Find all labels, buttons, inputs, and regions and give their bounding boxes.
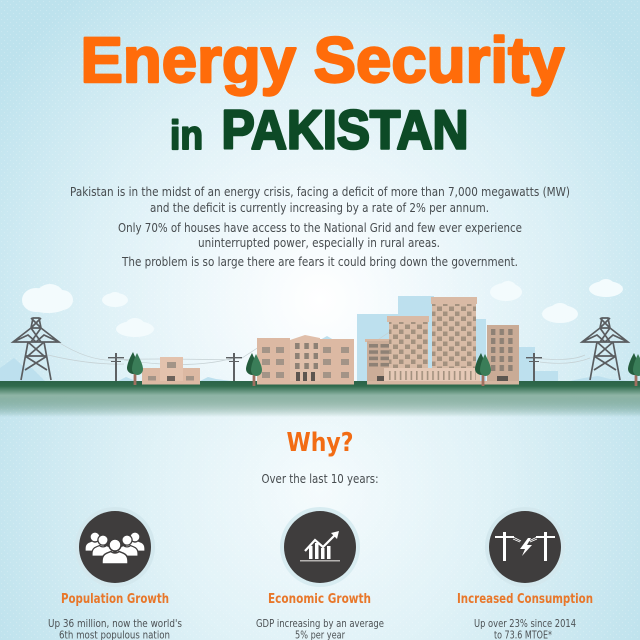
icon: people xyxy=(75,507,155,587)
heading: Population Growth xyxy=(61,592,169,607)
trees xyxy=(127,352,143,385)
subheading: Over the last 10 years: xyxy=(262,472,378,486)
small house xyxy=(142,357,200,384)
heading: Economic Growth xyxy=(268,592,371,607)
description: Up 36 million, now the world's xyxy=(48,617,182,630)
skyline illustration xyxy=(0,279,640,417)
icon: power poles with bolt xyxy=(485,507,565,587)
blue background shapes xyxy=(0,296,630,381)
description xyxy=(48,617,182,640)
downtown towers xyxy=(365,297,519,384)
ground xyxy=(0,381,640,417)
title: PAKISTAN xyxy=(222,98,468,160)
description xyxy=(474,617,576,640)
column: increased consumption xyxy=(457,507,593,640)
heading: Increased Consumption xyxy=(457,592,593,607)
description: Up over 23% since 2014 xyxy=(474,617,576,630)
transmission towers xyxy=(13,318,59,380)
intro text: The problem is so large there are fears it could bring down the government. xyxy=(121,255,518,269)
power lines xyxy=(48,325,590,365)
icon: rising chart xyxy=(280,507,360,587)
intro text: and the deficit is currently increasing by a rate of 2% per annum. xyxy=(150,201,489,215)
intro text: Only 70% of houses have access to the National Grid and few ever experience xyxy=(118,221,522,235)
clouds xyxy=(22,279,623,337)
heading: why: Why? xyxy=(286,428,354,458)
column: economic growth xyxy=(256,507,384,640)
description: GDP increasing by an average xyxy=(256,617,384,630)
utility poles xyxy=(108,353,124,382)
title: Energy Security xyxy=(80,24,565,96)
description xyxy=(256,617,384,640)
intro text: uninterrupted power, especially in rural areas. xyxy=(198,236,440,250)
mid-rise building xyxy=(257,335,354,384)
intro text xyxy=(70,185,570,269)
column: population growth xyxy=(48,507,182,640)
title: in xyxy=(170,112,203,158)
intro text: Pakistan is in the midst of an energy crisis, facing a deficit of more than 7,000 megawatts (MW) xyxy=(70,185,570,199)
title xyxy=(80,24,565,160)
